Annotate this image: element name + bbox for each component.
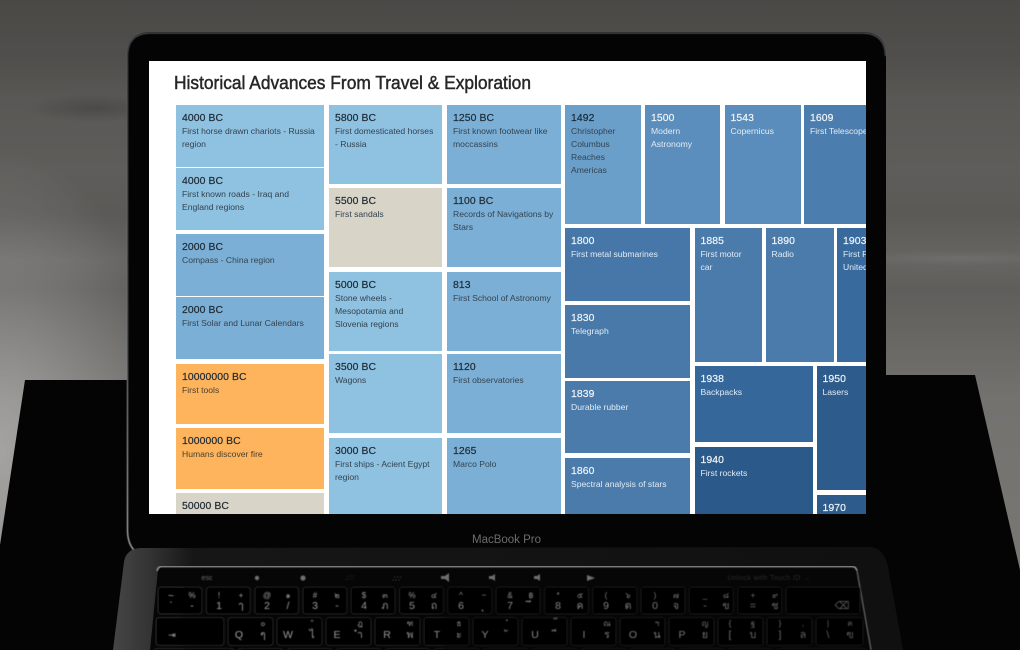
cell: 3000 BC ships: 3000 BC	[335, 446, 376, 456]
touch bar: ∴∵	[346, 575, 355, 582]
table	[0, 375, 1020, 650]
letter row key labels: ฐ	[751, 619, 755, 628]
cell: 1265 Marco Polo: 1265	[453, 446, 477, 456]
keyboard right edge	[857, 571, 871, 650]
cell: 1839 rubber	[565, 381, 690, 453]
letter row key labels: ะ	[456, 629, 462, 641]
cell: 1950 lasers: Lasers	[822, 387, 848, 397]
number row key labels: ฿	[528, 591, 534, 600]
cell: 5800 BC horses: - Russia	[335, 138, 367, 148]
letter row key labels: ]	[779, 629, 782, 641]
cell: 1265 Marco Polo: Marco Polo	[453, 458, 496, 468]
number row key labels	[168, 590, 849, 612]
number row key labels: %	[188, 591, 196, 600]
cell: 2000 BC calendars	[176, 297, 324, 359]
cell: 50000 BC	[176, 493, 324, 523]
cell: 1839 rubber: Durable rubber	[571, 402, 628, 412]
cell: 1890 radio: 1890	[772, 236, 795, 247]
number row key labels: ๕	[577, 591, 583, 600]
number row key labels: ๅ	[238, 600, 244, 612]
number row key labels: 3	[312, 600, 318, 612]
number row key labels: $	[362, 591, 367, 600]
letter row key labels: [	[729, 629, 732, 641]
touch bar	[202, 573, 810, 583]
cell: 3500 BC wagons: 3500 BC	[335, 362, 376, 373]
cell: 1970: 1970	[822, 502, 846, 514]
cell: 1940 rockets: 1940	[700, 454, 724, 466]
cell: 813 astronomy school: 813	[453, 280, 471, 290]
letter row key labels: บ	[750, 629, 756, 641]
cell: 1885 motor car: 1885	[700, 236, 724, 247]
number row key labels: ภ	[382, 600, 389, 612]
cell: 1120 observatories	[447, 354, 561, 433]
cell: 1903 first flight: 1903	[843, 236, 866, 247]
letter row key labels: ร	[604, 629, 610, 641]
cell: 4000 BC chariots: region	[182, 138, 206, 148]
letter row key labels: T	[434, 629, 441, 641]
number row key labels: ๗	[673, 591, 679, 600]
cell: 1890 radio: Radio	[772, 249, 794, 259]
cell: 1492 Columbus: Reaches	[571, 152, 605, 162]
number row key labels: ๔	[431, 591, 437, 600]
keyboard keys	[154, 587, 867, 650]
cell: 2000 BC compass	[176, 234, 324, 296]
number row key labels: ⌫	[834, 600, 849, 612]
number row key labels: ถ	[431, 600, 437, 612]
number row key labels: ~	[482, 591, 487, 600]
number row key labels: ข	[722, 600, 730, 612]
cell: 5500 BC sandals: First sandals	[335, 209, 384, 219]
letter row key labels: ย	[702, 629, 708, 641]
laptop lid	[127, 32, 886, 548]
letter row key labels: P	[678, 629, 686, 641]
cell: 1000000 BC fire: Humans discover fire	[182, 449, 263, 459]
number row key labels: 9	[603, 600, 609, 612]
cell: 813 astronomy school: First School of Astronomy	[453, 292, 551, 302]
cell: 3000 BC ships: region	[335, 472, 359, 482]
cell: 1250 BC footwear: First known footwear like	[453, 126, 548, 136]
cell: 1860 spectral analysis: Spectral analysis of stars	[571, 478, 667, 488]
cell: 4000 BC roads: England regions	[182, 202, 244, 212]
letter row key labels: ำ	[354, 629, 363, 641]
number row key labels: 0	[652, 600, 658, 612]
cell: 1120 observatories: 1120	[453, 362, 476, 373]
cell: 1000000 BC fire	[176, 428, 324, 489]
letter row key labels: พ	[407, 629, 414, 641]
letter row key labels: น	[653, 629, 661, 641]
cell: 1265 Marco Polo	[447, 438, 561, 518]
letter row key labels: "	[311, 619, 314, 628]
letter row key labels: ⇥	[168, 630, 176, 640]
cell: 4000 BC roads: First known roads - Iraq and	[182, 188, 289, 198]
cell: 5000 BC stone wheels: Mesopotamia and	[335, 306, 403, 316]
cell: 1839 rubber: 1839	[571, 389, 595, 400]
cell: 1100 BC navigation: 1100 BC	[453, 196, 493, 207]
cell: 1860 spectral analysis: 1860	[571, 466, 595, 476]
cell: 1543 Copernicus: 1543	[730, 112, 754, 124]
cell: 4000 BC chariots: First horse drawn chariots - Russia	[182, 126, 315, 136]
cell: 1885 motor car: First motor	[700, 249, 742, 259]
cell: 813 astronomy school	[447, 272, 561, 350]
number row key labels: +	[751, 591, 756, 600]
cell: 1543 Copernicus: Copernicus	[730, 126, 774, 136]
number row key labels: (	[605, 591, 608, 600]
number row key labels: ค	[576, 600, 584, 612]
number row key labels: ๑	[285, 591, 291, 600]
cell: 1940 rockets: First rockets	[700, 468, 747, 478]
number row key labels: ~	[168, 590, 174, 602]
cell: 10000000 BC tools	[176, 364, 324, 424]
number row key labels: ๙	[772, 591, 778, 600]
keyboard well	[150, 566, 871, 650]
cell: 1500 astronomy: Modern	[651, 126, 680, 136]
number row key labels: *	[556, 591, 560, 600]
cell: 1938 backpacks: Backpacks	[700, 387, 742, 397]
letter row key labels: ํ	[505, 619, 508, 622]
letter row key labels	[168, 617, 854, 641]
letter row key labels: O	[629, 629, 637, 641]
number row key labels: %	[408, 591, 416, 600]
number row key labels: ๓	[382, 591, 388, 600]
letter row key labels: ฑ	[407, 619, 413, 628]
number row key labels: ๖	[625, 591, 631, 600]
number row key labels: 6	[458, 600, 464, 612]
number row key labels: 2	[264, 600, 270, 612]
number row key labels: ต	[625, 600, 632, 612]
letter row key labels: \	[827, 629, 830, 641]
cell: 1250 BC footwear: moccassins	[453, 138, 498, 148]
number row key labels: -	[703, 600, 707, 612]
cell: 1940 rockets	[694, 446, 812, 518]
cell: 5800 BC horses: First domesticated horses	[335, 126, 433, 136]
cell: 1950 lasers: 1950	[822, 374, 846, 385]
letter row key labels: U	[531, 629, 539, 641]
MacBook Pro label: MacBook Pro	[472, 534, 541, 546]
number row key labels: ช	[771, 600, 779, 612]
number row key labels: ๘	[723, 591, 729, 600]
cell: 1885 motor car	[694, 228, 762, 362]
number row key labels: ึ	[525, 600, 531, 604]
letter row key labels: ญ	[702, 619, 709, 628]
cell: 1903 first flight	[837, 228, 866, 362]
number row key labels: -	[335, 600, 339, 612]
cell: 3000 BC ships	[329, 438, 442, 518]
cell: 1500 astronomy: Astronomy	[651, 138, 692, 148]
cell: 50000 BC: 50000 BC	[182, 501, 229, 512]
number row key labels: 8	[555, 600, 561, 612]
cell: 4000 BC roads: 4000 BC	[182, 176, 223, 186]
cell: 3000 BC ships: First ships - Acient Egypt	[335, 458, 430, 468]
cell: 3500 BC wagons: Wagons	[335, 375, 366, 385]
letter row key labels: ี	[551, 628, 557, 632]
letter row key labels: I	[583, 629, 585, 641]
touch bar: ∴∵	[393, 576, 402, 583]
cell: 1800 submarines	[565, 228, 690, 301]
number row key labels: =	[750, 600, 756, 612]
cell: 1609 telescope: 1609	[810, 112, 834, 124]
letter row key labels: }	[779, 619, 782, 628]
number row key labels: ุ	[481, 609, 484, 612]
cell: 2000 BC calendars: 2000 BC	[182, 305, 223, 316]
number row key labels: `	[169, 600, 173, 612]
cell: 1492 Columbus: Americas	[571, 164, 607, 174]
cell: 3500 BC wagons	[329, 354, 442, 433]
cell: 5500 BC sandals: 5500 BC	[335, 196, 376, 207]
cell: 1860 spectral analysis	[565, 458, 690, 518]
letter row key labels: ๐	[261, 619, 266, 628]
cell: 1938 backpacks: 1938	[700, 374, 724, 385]
cell: 1885 motor car: car	[700, 262, 712, 272]
touch bar: esc	[202, 575, 213, 582]
cell: 1500 astronomy: 1500	[651, 112, 675, 124]
letter row key labels: ธ	[457, 619, 462, 628]
cell: 1800 submarines: 1800	[571, 236, 595, 247]
cell: 4000 BC chariots: 4000 BC	[182, 112, 223, 124]
cell: 1120 observatories: First observatories	[453, 375, 524, 385]
number row key labels: !	[218, 591, 220, 600]
cell: 1100 BC navigation: Stars	[453, 222, 473, 232]
cell: 1492 Columbus: Columbus	[571, 138, 610, 148]
number row key labels: ๒	[334, 591, 340, 600]
number row key labels: +	[239, 591, 244, 600]
number row key labels: _	[702, 591, 708, 600]
number row key labels: 7	[507, 600, 513, 612]
number row key labels: #	[313, 591, 318, 600]
letter row key labels: ฎ	[357, 619, 363, 628]
laptop screen with treemap dashboard	[149, 61, 866, 514]
number row key labels: จ	[673, 600, 679, 612]
touch bar edge highlight	[157, 566, 857, 571]
cell: 1000000 BC fire: 1000000 BC	[182, 436, 241, 447]
cell: 5000 BC stone wheels: Slovenia regions	[335, 318, 399, 328]
cell: 5000 BC stone wheels: Stone wheels -	[335, 292, 392, 302]
cell: 2000 BC compass: Compass - China region	[182, 255, 275, 265]
laptop base	[113, 547, 903, 650]
letter row key labels: W	[283, 629, 293, 641]
cell: 5500 BC sandals	[329, 188, 442, 267]
cell: 5800 BC horses: 5800 BC	[335, 112, 376, 124]
letter row key labels: ,	[802, 619, 804, 628]
cell: 1492 Columbus: Christopher	[571, 126, 615, 136]
number row key labels: 1	[216, 600, 222, 612]
letter row key labels: ๆ	[260, 629, 266, 641]
number row key labels: /	[287, 600, 290, 612]
number row key labels: ^	[459, 591, 463, 600]
letter row key labels: Q	[235, 629, 243, 641]
letter row key labels: ฯ	[655, 619, 659, 628]
number row key labels: &	[507, 591, 513, 600]
cell: 10000000 BC tools: 10000000 BC	[182, 372, 247, 383]
cell: 1543 Copernicus	[724, 104, 800, 224]
title: Historical Advances From Travel & Exploration	[174, 73, 531, 93]
number row key labels: )	[654, 591, 657, 600]
cell: 5800 BC horses	[329, 104, 442, 184]
cell: 2000 BC compass: 2000 BC	[182, 242, 223, 253]
cell: 1938 backpacks	[694, 366, 812, 442]
cell: 2000 BC calendars: First Solar and Lunar Calendars	[182, 318, 304, 328]
letter row key labels: ฅ	[847, 619, 853, 628]
cell: 1830 telegraph: Telegraph	[571, 326, 609, 336]
touch bar: Unlock with Touch ID →	[728, 575, 810, 582]
cell: 1950 lasers	[816, 366, 866, 490]
cell: 1100 BC navigation	[447, 188, 561, 267]
letter row key labels: ฃ	[846, 629, 854, 641]
letter row key labels: Y	[481, 629, 489, 641]
cell: 1830 telegraph: 1830	[571, 312, 595, 324]
cell: 1970	[816, 494, 866, 520]
cell: 10000000 BC tools: First tools	[182, 385, 219, 395]
cell: 1609 telescope: First Telescope	[810, 126, 866, 136]
letter row key labels: ล	[800, 629, 806, 641]
number row key labels: 4	[361, 600, 367, 612]
cell: 1500 astronomy	[645, 104, 720, 224]
number row key labels: -	[190, 600, 194, 612]
letter row key labels: {	[729, 619, 732, 628]
cell: 1800 submarines: First metal submarines	[571, 249, 658, 259]
cell: 1890 radio	[766, 228, 834, 362]
number row key labels: @	[263, 591, 271, 600]
letter row key labels: ๊	[553, 617, 558, 620]
cell: 1492 Columbus	[565, 104, 641, 224]
lid edge highlight	[128, 33, 886, 552]
letter row key labels: ไ	[308, 628, 315, 641]
cell: 1250 BC footwear: 1250 BC	[453, 112, 494, 124]
number row key labels: 5	[409, 600, 415, 612]
letter row key labels: ั	[504, 629, 508, 632]
cell: 5000 BC stone wheels	[329, 272, 442, 350]
cell: 4000 BC roads	[176, 168, 324, 230]
cell: 1492 Columbus: 1492	[571, 112, 595, 124]
cell: 1100 BC navigation: Records of Navigations by	[453, 209, 553, 219]
cell: 1830 telegraph	[565, 304, 690, 378]
cell: 5000 BC stone wheels: 5000 BC	[335, 280, 376, 290]
cell: 1250 BC footwear	[447, 104, 561, 184]
cell: 4000 BC chariots	[176, 104, 324, 166]
letter row key labels: |	[827, 619, 829, 628]
letter row key labels: ณ	[603, 619, 611, 628]
letter row key labels: E	[333, 629, 341, 641]
letter row key labels: R	[383, 629, 391, 641]
cell: 1609 telescope	[804, 104, 866, 224]
